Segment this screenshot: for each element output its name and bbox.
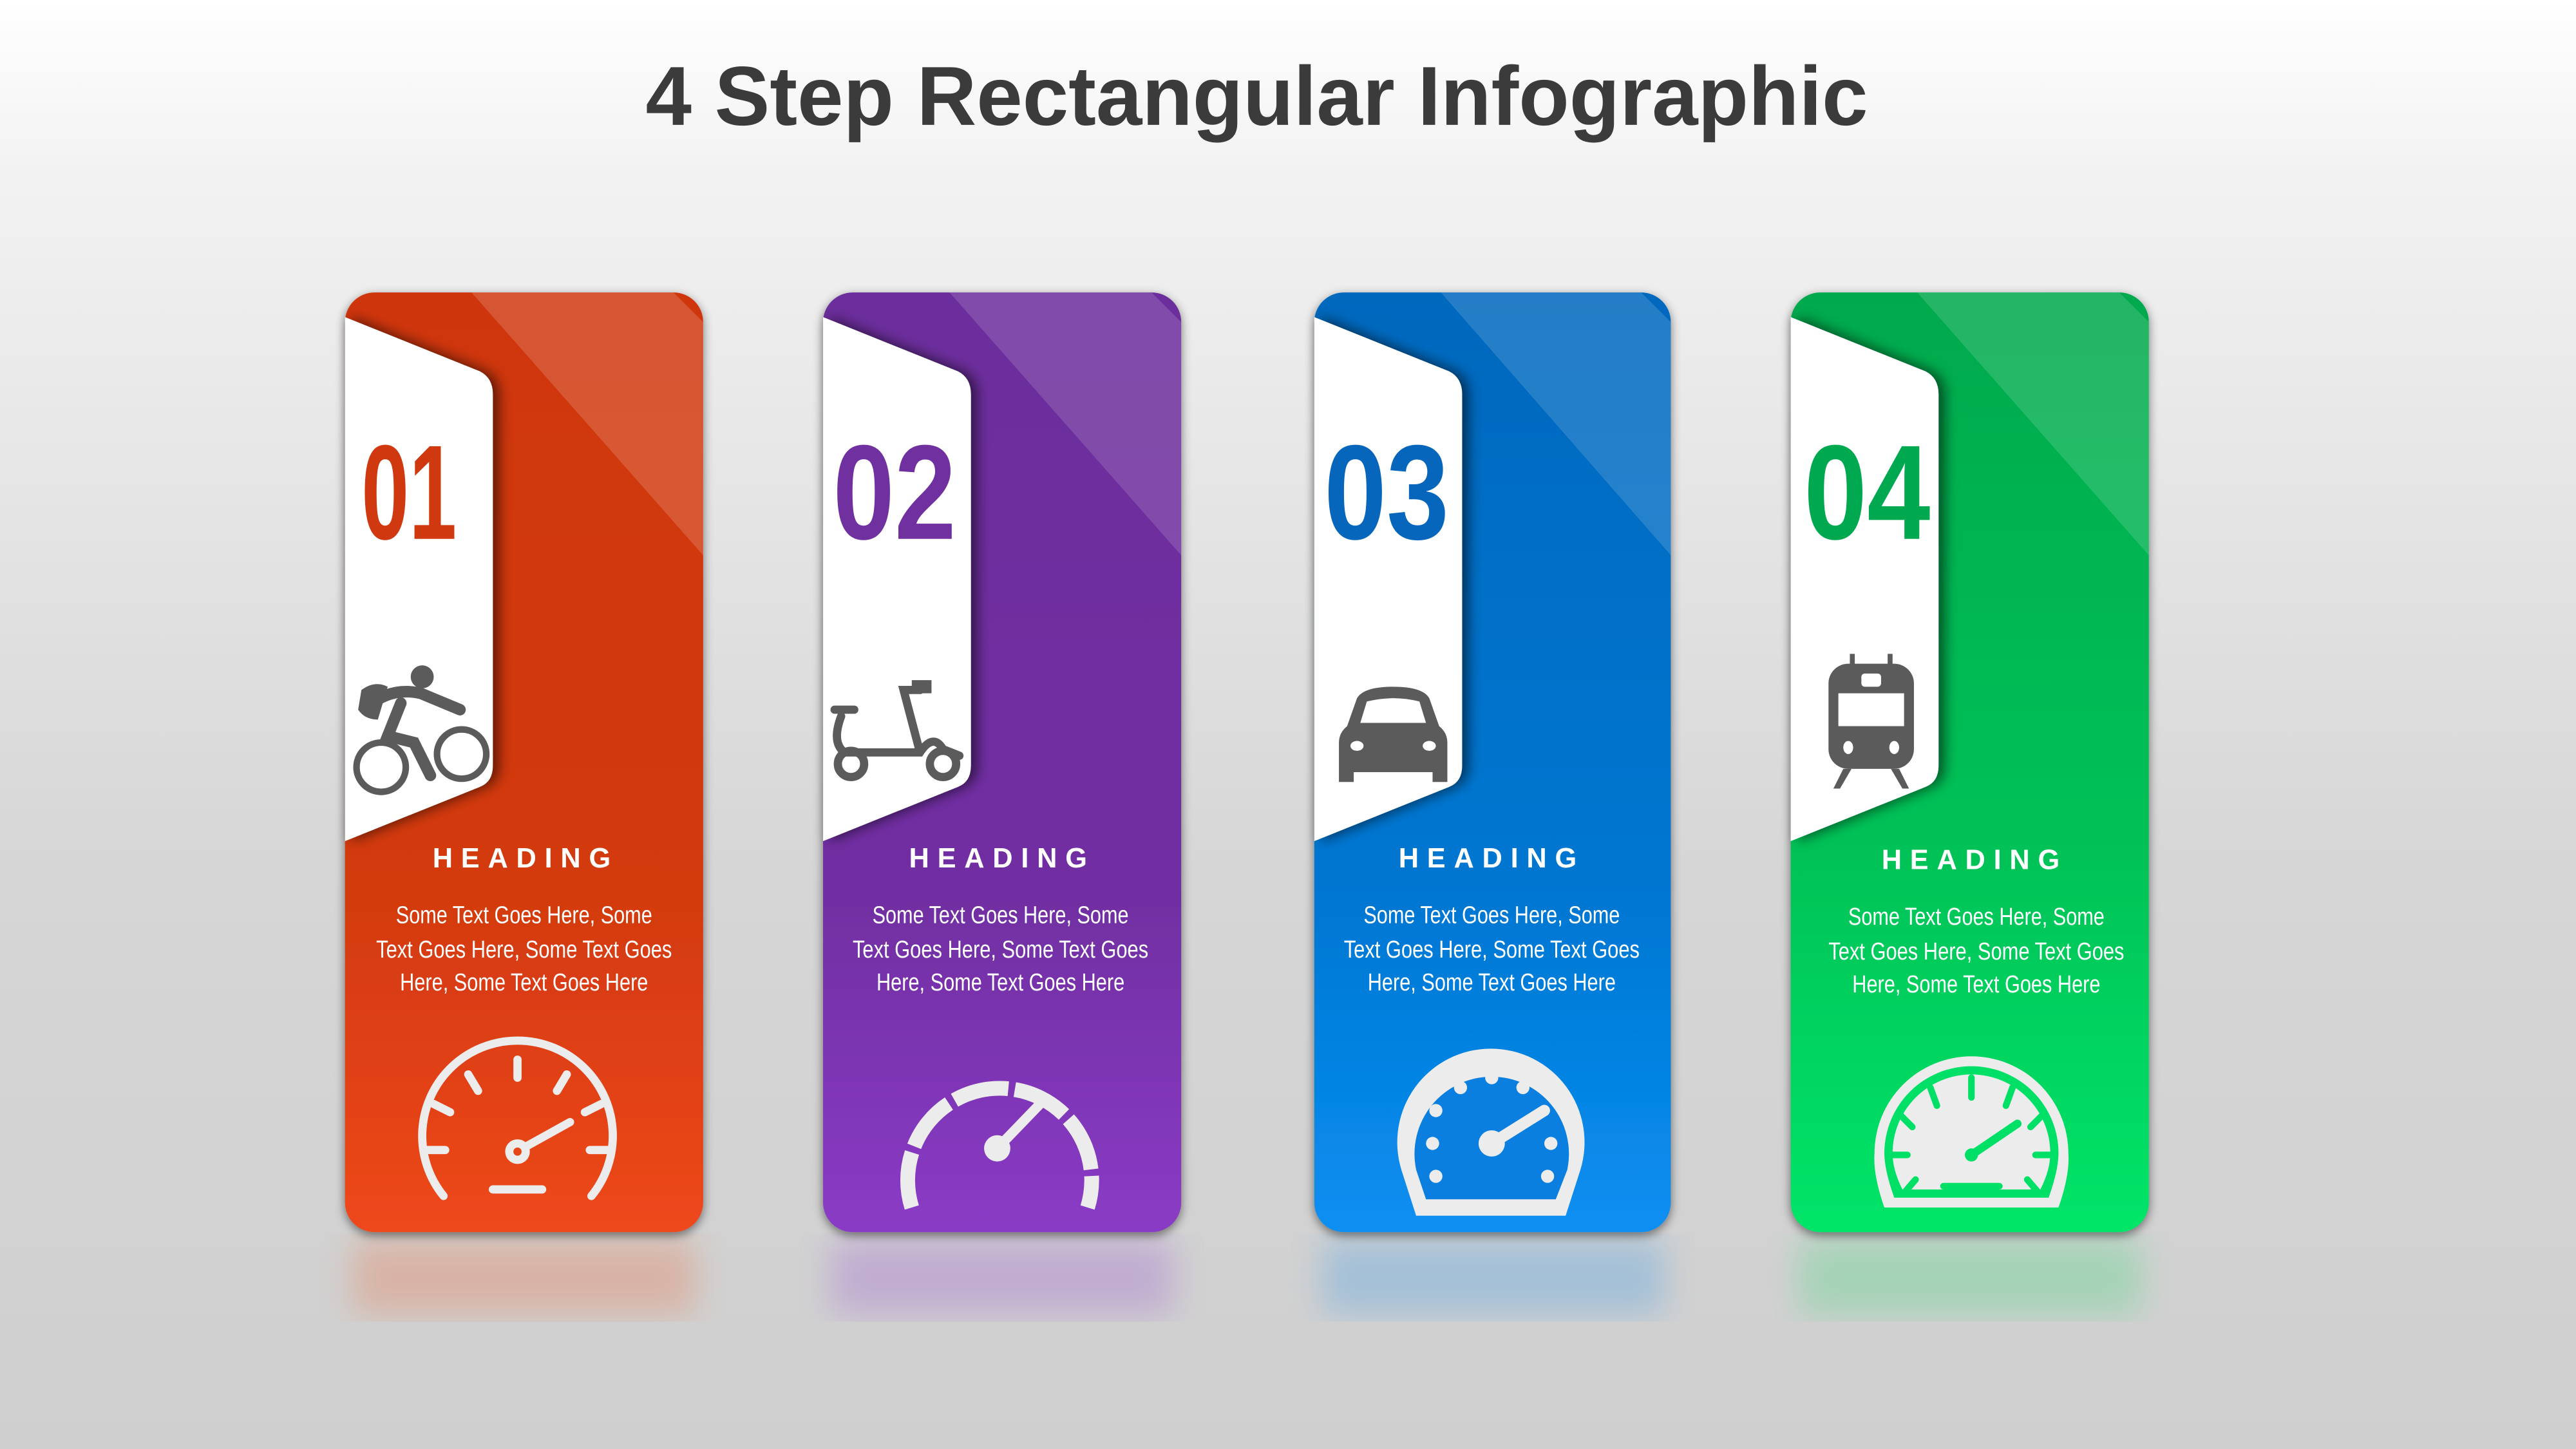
reflection 4 bbox=[1799, 1240, 2141, 1314]
number 02: 02 bbox=[833, 418, 956, 568]
body text 2: Some Text Goes Here, Some bbox=[873, 902, 1129, 929]
body text 1 bbox=[376, 902, 672, 996]
body text 4: Here, Some Text Goes Here bbox=[1852, 971, 2100, 998]
body text 3: Some Text Goes Here, Some bbox=[1363, 902, 1620, 929]
icon: car bbox=[1339, 687, 1447, 782]
icon: scooter bbox=[835, 680, 960, 777]
body text 2: Text Goes Here, Some Text Goes bbox=[853, 936, 1148, 963]
card 2 bbox=[823, 292, 1181, 1314]
number 03: 03 bbox=[1324, 418, 1449, 568]
card 3 bbox=[1314, 292, 1671, 1314]
heading 4: HEADING bbox=[1882, 844, 2068, 875]
heading 2: HEADING bbox=[909, 843, 1095, 874]
reflection 2 bbox=[831, 1240, 1173, 1314]
tab 2 bbox=[823, 317, 971, 841]
tab 1 bbox=[345, 317, 493, 841]
body text 4: Some Text Goes Here, Some bbox=[1848, 903, 2105, 931]
gauge 1 bbox=[422, 1041, 613, 1196]
body text 4: Text Goes Here, Some Text Goes bbox=[1828, 938, 2124, 965]
card 4 bbox=[1791, 292, 2149, 1314]
body text 2: Here, Some Text Goes Here bbox=[876, 969, 1124, 996]
icon: train bbox=[1828, 654, 1914, 788]
icon: bicycle bbox=[357, 665, 486, 792]
reflection 1 bbox=[353, 1240, 695, 1314]
gauge 4 bbox=[1874, 1056, 2069, 1208]
body text 3 bbox=[1344, 902, 1640, 996]
body text 1: Here, Some Text Goes Here bbox=[400, 969, 648, 996]
title: 4 Step Rectangular Infographic bbox=[646, 49, 1868, 143]
tab 3 bbox=[1314, 317, 1462, 841]
body text 1: Some Text Goes Here, Some bbox=[396, 902, 652, 929]
gauge 2 bbox=[907, 1088, 1092, 1208]
body text 2 bbox=[853, 902, 1148, 996]
body text 3: Here, Some Text Goes Here bbox=[1368, 969, 1616, 996]
card 1 bbox=[345, 292, 703, 1314]
body text 3: Text Goes Here, Some Text Goes bbox=[1344, 936, 1640, 963]
number 04: 04 bbox=[1804, 418, 1930, 568]
heading 3: HEADING bbox=[1399, 843, 1585, 874]
body text 1: Text Goes Here, Some Text Goes bbox=[376, 936, 672, 963]
gauge 3 bbox=[1397, 1048, 1584, 1216]
number 01: 01 bbox=[361, 418, 457, 568]
body text 4 bbox=[1828, 903, 2124, 998]
reflection 3 bbox=[1323, 1240, 1664, 1314]
heading 1: HEADING bbox=[433, 843, 619, 874]
tab 4 bbox=[1791, 317, 1938, 841]
